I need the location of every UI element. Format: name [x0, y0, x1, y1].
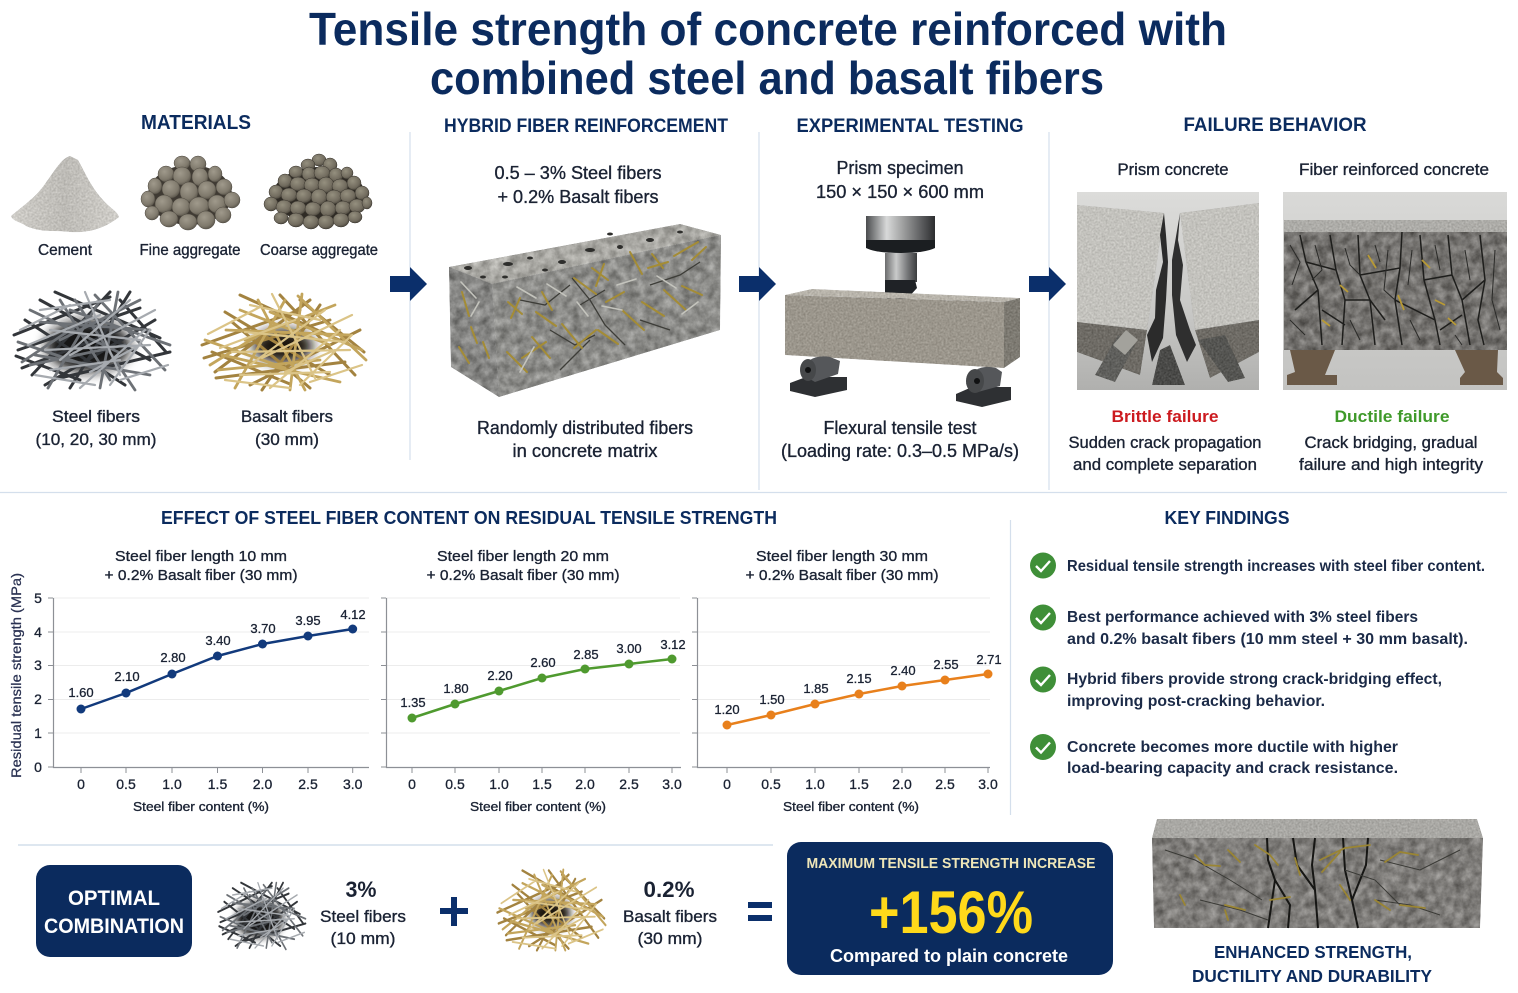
chart: 10 mm steel fiber: 3.95 — [295, 613, 321, 628]
chart: 30 mm steel fiber: + 0.2% Basalt fiber (30 mm) — [746, 567, 938, 584]
text: 0.2% basalt fibers: (30 mm) — [638, 930, 702, 948]
text: prism specimen — [816, 158, 984, 202]
chart: 20 mm steel fiber: 3.0 — [662, 776, 682, 792]
label: fine aggregate: Fine aggregate — [140, 242, 241, 259]
arrow: materials to hybrid — [390, 267, 427, 301]
chart: 10 mm steel fiber: Steel fiber content (%) — [133, 799, 269, 814]
chart: 30 mm steel fiber: 2.15 — [846, 671, 872, 686]
finding 3: Hybrid fibers provide strong crack-bridging effect, — [1067, 671, 1442, 688]
chart: 10 mm steel fiber: 2.10 — [114, 669, 140, 684]
chart: 10 mm steel fiber: 1.5 — [208, 776, 227, 792]
label: basalt fibers: (30 mm) — [255, 430, 319, 449]
icon: plus sign — [440, 897, 468, 926]
chart: 10 mm steel fiber: 3.0 — [343, 776, 363, 792]
chart: 20 mm steel fiber: 0.5 — [445, 776, 465, 792]
text: fiber dosage: 0.5 – 3% Steel fibers — [494, 163, 662, 183]
heading: experimental testing: EXPERIMENTAL TESTING — [796, 116, 1024, 137]
callout: optimal combination label: OPTIMAL — [68, 887, 160, 910]
icon: concrete block with fibers — [449, 224, 721, 397]
text: prism specimen: 150 × 150 × 600 mm — [816, 182, 984, 202]
chart: 30 mm steel fiber: 2.40 — [890, 663, 916, 678]
y-axis title: Residual tensile strength (MPa) — [8, 573, 24, 778]
title — [309, 3, 1227, 104]
label: coarse aggregate: Coarse aggregate — [260, 242, 378, 259]
chart: 20 mm steel fiber — [381, 548, 686, 814]
chart: 10 mm steel fiber: 0.5 — [116, 776, 136, 792]
chart: 10 mm steel fiber: 0 — [34, 759, 42, 775]
panel: materials — [11, 112, 378, 449]
finding 1 — [1030, 552, 1485, 578]
text: brittle failure: Sudden crack propagation — [1068, 434, 1262, 452]
chart: 20 mm steel fiber: 1.0 — [489, 776, 509, 792]
finding 2: Best performance achieved with 3% steel fibers — [1067, 609, 1418, 626]
text: 0.2% basalt fibers: 0.2% — [644, 877, 694, 902]
panel: hybrid fiber reinforcement — [444, 116, 728, 461]
text: brittle failure — [1068, 407, 1262, 474]
text: 0.2% basalt fibers — [623, 877, 717, 948]
chart: 30 mm steel fiber: 1.5 — [849, 776, 869, 792]
panel: failure behavior — [1068, 114, 1507, 474]
chart: 20 mm steel fiber: 2.20 — [487, 668, 513, 683]
image: brittle failure specimen — [1077, 192, 1259, 390]
callout: optimal combination label — [36, 865, 192, 957]
title: combined steel and basalt fibers — [430, 52, 1104, 104]
text: 3% steel fibers: 3% — [346, 877, 376, 902]
text: 3% steel fibers: (10 mm) — [330, 930, 396, 948]
callout: maximum tensile strength increase — [787, 842, 1113, 975]
label: fiber reinforced concrete: Fiber reinforced concrete — [1299, 161, 1489, 179]
heading: materials: MATERIALS — [141, 112, 251, 134]
chart: 10 mm steel fiber: 2 — [34, 691, 42, 707]
chart: 20 mm steel fiber: Steel fiber content (%) — [470, 799, 606, 814]
text: enhanced strength caption — [1192, 942, 1432, 986]
chart: 20 mm steel fiber: 0 — [408, 776, 416, 792]
text: fiber dosage — [494, 163, 662, 207]
chart: 10 mm steel fiber: 5 — [34, 590, 42, 606]
chart: 30 mm steel fiber: 0 — [723, 776, 731, 792]
icon: basalt fibers pile — [202, 294, 366, 390]
chart: 30 mm steel fiber: 1.20 — [714, 702, 740, 717]
label: steel fibers — [36, 407, 156, 449]
label: prism concrete: Prism concrete — [1118, 161, 1228, 179]
panel: experimental testing — [781, 116, 1024, 461]
finding 4 — [1030, 734, 1398, 777]
image: ductile failure specimen — [1283, 192, 1507, 390]
chart: 30 mm steel fiber — [692, 548, 1002, 814]
chart: 10 mm steel fiber: 2.0 — [253, 776, 272, 792]
label: steel fibers: (10, 20, 30 mm) — [36, 430, 156, 449]
finding 2: and 0.2% basalt fibers (10 mm steel + 30 mm basalt). — [1067, 631, 1468, 648]
chart: 30 mm steel fiber: 2.0 — [892, 776, 912, 792]
arrow: testing to failure — [1029, 267, 1066, 301]
chart: 10 mm steel fiber: Steel fiber length 10 mm — [115, 548, 287, 565]
finding 3: improving post-cracking behavior. — [1067, 693, 1325, 710]
text: fiber distribution note — [477, 418, 693, 461]
text: flexural tensile test — [781, 418, 1019, 461]
title: Tensile strength of concrete reinforced with — [309, 3, 1227, 55]
finding 4: load-bearing capacity and crack resistance. — [1067, 760, 1398, 777]
callout: maximum tensile strength increase: Compared to plain concrete — [830, 946, 1068, 966]
icon: steel fibers small — [218, 883, 305, 949]
text: 0.2% basalt fibers: Basalt fibers — [623, 908, 717, 926]
chart: 30 mm steel fiber: Steel fiber length 30 mm — [756, 548, 928, 565]
heading: charts section: EFFECT OF STEEL FIBER CONTENT ON RESIDUAL TENSILE STRENGTH — [161, 508, 777, 528]
heading: hybrid fiber reinforcement: HYBRID FIBER REINFORCEMENT — [444, 116, 728, 137]
callout: optimal combination label: COMBINATION — [44, 915, 184, 938]
finding 2 — [1030, 604, 1468, 648]
chart: 10 mm steel fiber — [34, 548, 369, 814]
text: enhanced strength caption: DUCTILITY AND DURABILITY — [1192, 966, 1432, 986]
chart: 10 mm steel fiber: 2.80 — [160, 650, 186, 665]
text: fiber distribution note: in concrete matrix — [512, 441, 658, 461]
chart: 20 mm steel fiber: 1.35 — [400, 695, 426, 710]
chart: 10 mm steel fiber: 3.40 — [205, 633, 231, 648]
chart: 20 mm steel fiber: Steel fiber length 20 mm — [437, 548, 609, 565]
chart: 10 mm steel fiber: 3 — [34, 657, 42, 673]
chart: 20 mm steel fiber: 1.80 — [443, 681, 469, 696]
chart: 20 mm steel fiber: 3.12 — [660, 637, 686, 652]
text: brittle failure: Brittle failure — [1112, 407, 1218, 426]
icon: flexural test rig — [785, 216, 1020, 407]
text: ductile failure: Ductile failure — [1334, 407, 1450, 426]
icon: cement pile — [11, 156, 119, 232]
text: prism specimen: Prism specimen — [836, 158, 964, 178]
chart: 10 mm steel fiber: 1.60 — [68, 685, 94, 700]
chart: 10 mm steel fiber: 4 — [34, 624, 42, 640]
text: flexural tensile test: (Loading rate: 0.3–0.5 MPa/s) — [781, 441, 1019, 461]
label: basalt fibers: Basalt fibers — [241, 407, 333, 426]
chart: 20 mm steel fiber: 2.5 — [619, 776, 639, 792]
chart: 10 mm steel fiber: 2.5 — [298, 776, 318, 792]
text: flexural tensile test: Flexural tensile test — [824, 418, 976, 438]
chart: 20 mm steel fiber: 2.85 — [573, 647, 599, 662]
chart: 30 mm steel fiber: 1.0 — [805, 776, 825, 792]
text: 3% steel fibers: Steel fibers — [320, 908, 406, 926]
chart: 10 mm steel fiber: 0 — [77, 776, 85, 792]
chart: 30 mm steel fiber: Steel fiber content (%) — [783, 799, 919, 814]
label: steel fibers: Steel fibers — [52, 407, 140, 426]
chart: 20 mm steel fiber: 2.60 — [530, 655, 556, 670]
arrow: hybrid to testing — [739, 267, 776, 301]
icon: coarse aggregate pile — [264, 154, 372, 229]
chart: 30 mm steel fiber: 2.55 — [933, 657, 959, 672]
chart: 10 mm steel fiber: 4.12 — [340, 607, 366, 622]
chart: 30 mm steel fiber: 2.5 — [935, 776, 955, 792]
text: ductile failure — [1299, 407, 1484, 474]
icon: basalt fibers small — [497, 870, 606, 950]
finding 3 — [1030, 666, 1442, 710]
finding 4: Concrete becomes more ductile with higher — [1067, 739, 1398, 756]
callout: maximum tensile strength increase: MAXIMUM TENSILE STRENGTH INCREASE — [806, 855, 1096, 872]
text: enhanced strength caption: ENHANCED STRENGTH, — [1214, 942, 1412, 962]
text: fiber dosage: + 0.2% Basalt fibers — [498, 187, 658, 207]
text: fiber distribution note: Randomly distributed fibers — [477, 418, 693, 438]
finding 1: Residual tensile strength increases with steel fiber content. — [1067, 558, 1485, 575]
text: 3% steel fibers — [320, 877, 406, 948]
image: cracked fiber block — [1152, 819, 1483, 928]
chart: 20 mm steel fiber: 2.0 — [575, 776, 595, 792]
label: basalt fibers — [241, 407, 333, 449]
chart: 10 mm steel fiber: + 0.2% Basalt fiber (30 mm) — [104, 567, 298, 584]
icon: steel fibers pile — [14, 292, 170, 390]
callout: maximum tensile strength increase: +156% — [869, 879, 1033, 946]
chart: 10 mm steel fiber: 1 — [34, 725, 42, 741]
heading: key findings: KEY FINDINGS — [1164, 508, 1290, 528]
chart: 10 mm steel fiber: 1.0 — [162, 776, 182, 792]
chart: 30 mm steel fiber: 1.85 — [803, 681, 829, 696]
heading: failure behavior: FAILURE BEHAVIOR — [1184, 114, 1366, 136]
text: ductile failure: failure and high integrity — [1299, 456, 1484, 474]
text: ductile failure: Crack bridging, gradual — [1304, 434, 1478, 452]
chart: 10 mm steel fiber: 3.70 — [250, 621, 276, 636]
chart: 20 mm steel fiber: + 0.2% Basalt fiber (30 mm) — [426, 567, 620, 584]
chart: 30 mm steel fiber: 2.71 — [976, 652, 1002, 667]
label: cement: Cement — [38, 242, 93, 259]
panel: key findings — [1030, 508, 1485, 777]
chart: 20 mm steel fiber: 1.5 — [532, 776, 552, 792]
icon: fine aggregate pile — [141, 156, 240, 230]
chart: 20 mm steel fiber: 3.00 — [616, 641, 642, 656]
text: brittle failure: and complete separation — [1073, 456, 1257, 474]
chart: 30 mm steel fiber: 1.50 — [759, 692, 785, 707]
chart: 30 mm steel fiber: 3.0 — [978, 776, 998, 792]
chart: 30 mm steel fiber: 0.5 — [761, 776, 781, 792]
icon: equals sign — [748, 902, 772, 921]
